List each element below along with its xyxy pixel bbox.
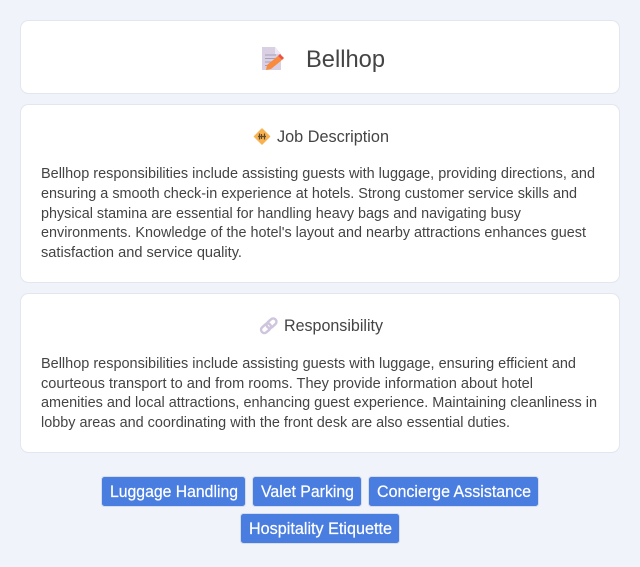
panel: title (20, 20, 620, 94)
responsibility text: lobby areas and coordinating with the front desk are also essential duties. (41, 415, 510, 431)
icon: orange diamond (254, 129, 270, 144)
responsibility text: amenities and local attractions, enhancing guest experience. Maintaining cleanliness in (41, 395, 597, 411)
tags (102, 476, 538, 544)
heading: job description: Job Description (277, 128, 389, 146)
tag: concierge assistance (368, 476, 538, 506)
job description text: physical stamina are essential for handling heavy bags and navigating busy (41, 206, 522, 222)
heading: responsibility: Responsibility (284, 317, 384, 335)
responsibility text: courteous transport to and from rooms. They provide information about hotel (41, 376, 533, 392)
job description text: environments. Knowledge of the hotel's layout and nearby attractions enhances guest (41, 225, 586, 241)
tag: concierge assistance: Concierge Assistance (377, 483, 531, 501)
tag: luggage handling (102, 476, 246, 506)
job description text: Bellhop responsibilities include assisting guests with luggage, providing directions, and (41, 166, 595, 182)
panel: responsibility (20, 294, 620, 452)
tag: luggage handling: Luggage Handling (110, 483, 238, 501)
job description text: ensuring a smooth check-in experience at hotels. Strong customer service skills and (41, 186, 577, 202)
responsibility text (41, 356, 597, 431)
tag: hospitality etiquette (240, 514, 400, 544)
responsibility text: Bellhop responsibilities include assisting guests with luggage, ensuring efficient and (41, 356, 576, 372)
tag: valet parking (252, 476, 362, 506)
job description text (41, 166, 595, 261)
panel: job description (20, 104, 620, 282)
tag: valet parking: Valet Parking (261, 483, 354, 501)
tag: hospitality etiquette: Hospitality Etiquette (249, 520, 392, 538)
icon: memo with pencil (262, 47, 284, 70)
job description text: satisfaction and service quality. (41, 245, 242, 261)
icon: chain link (260, 317, 278, 334)
title text: Bellhop (306, 46, 385, 73)
